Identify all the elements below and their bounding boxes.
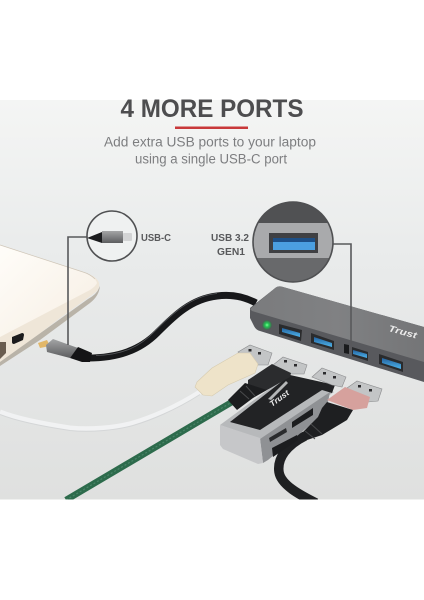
memory card slot [269,428,287,442]
USB port 1 [279,324,302,341]
black USB cable bottom right [279,436,316,503]
product photo [0,200,424,503]
callout circle: USB 3.2 port [250,200,336,284]
USB port 3 [352,347,368,361]
label: USB 3.2 GEN1: GEN1 [217,247,245,258]
hub logo: Trust [387,323,419,341]
label: USB-C: USB-C [141,233,171,244]
green braided cable [66,402,232,500]
black cable from connector to hub [88,295,256,358]
laptop side port [0,342,6,359]
callout line to USB 3.2 port [332,244,351,349]
black USB plug with green cable [228,357,307,410]
reflection on reader [268,381,288,400]
callout line to USB-C [68,237,88,345]
white cable [0,392,200,429]
card reader [220,375,335,464]
USB port 2 [311,333,334,350]
reader logo: Trust [268,388,291,409]
label: USB 3.2 GEN1 [211,233,249,258]
status LED [262,320,272,330]
memory card slot [272,435,298,457]
hub [250,286,424,382]
label: USB 3.2 GEN1: USB 3.2 [211,233,249,244]
USB port 4 [379,354,403,372]
metal head: reader plug [312,368,346,387]
pink USB plug with black strain relief [298,381,382,440]
cream USB plug [195,345,272,396]
port notch [344,344,349,354]
subtitle [104,134,316,166]
title underline [175,126,248,129]
title: 4 MORE PORTS [120,95,304,123]
memory card slot [292,408,313,428]
subtitle: Add extra USB ports to your laptop [104,134,316,150]
laptop USB-C port [12,333,24,344]
laptop [0,245,100,366]
callout circle: USB-C connector [87,211,137,261]
infographic canvas [0,99,424,500]
subtitle: using a single USB-C port [135,152,287,166]
photo background [0,100,424,500]
USB-C plug on laptop [38,339,92,362]
